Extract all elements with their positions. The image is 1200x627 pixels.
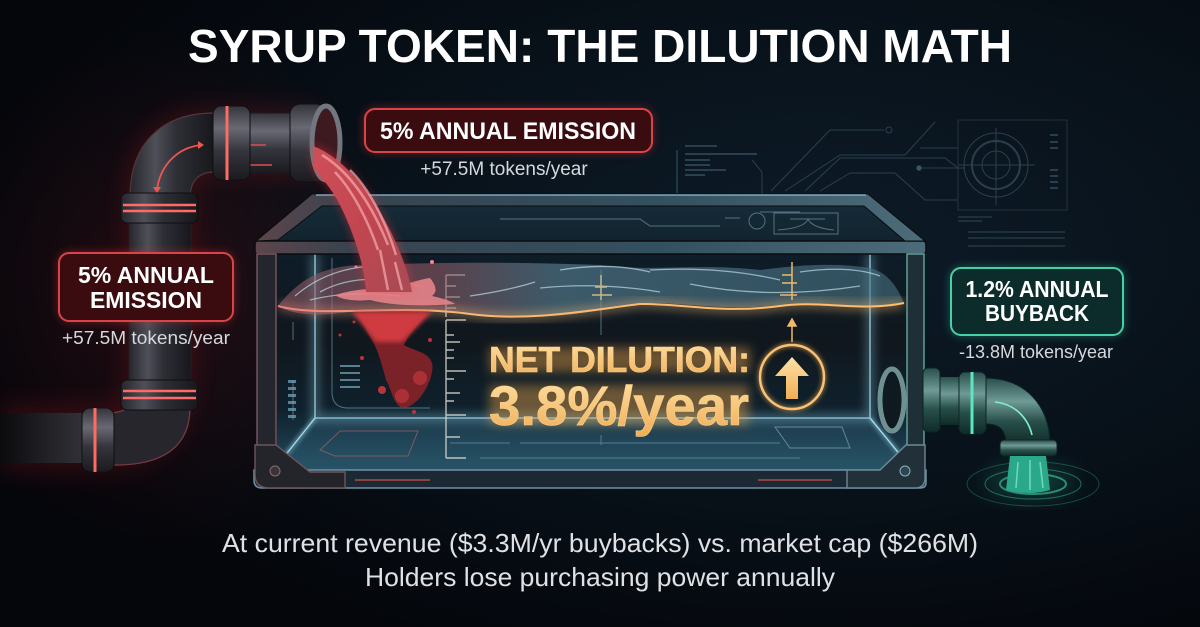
left bottom corner bracket xyxy=(255,445,345,488)
upper pipe xyxy=(245,113,295,173)
inner flange in tank xyxy=(880,369,904,431)
callout: left emission xyxy=(59,253,233,348)
tank back opening xyxy=(256,195,923,254)
scale ruler xyxy=(446,275,466,458)
ripple rings xyxy=(967,462,1099,506)
tank back wall glow xyxy=(280,254,906,462)
green water xyxy=(1006,456,1050,493)
callout: top emission: 5% ANNUAL EMISSION xyxy=(380,118,636,145)
callout: right buyback: -13.8M tokens/year xyxy=(959,342,1113,362)
pipe: red inlet xyxy=(0,104,340,472)
red plume in water xyxy=(338,312,432,414)
outlet pipe xyxy=(940,377,964,425)
lower elbow xyxy=(105,403,190,465)
net dilution figure: NET DILUTION: xyxy=(489,339,750,380)
callout: left emission: 5% ANNUAL xyxy=(78,262,214,288)
red water pour xyxy=(313,145,412,292)
elbow xyxy=(985,378,1050,445)
callout: top emission xyxy=(365,109,652,180)
water surface line glow xyxy=(278,303,904,317)
footer text: At current revenue ($3.3M/yr buybacks) vs. market cap ($266M) xyxy=(222,528,978,558)
net dilution figure xyxy=(489,339,750,437)
back top frame xyxy=(256,194,925,241)
flanges xyxy=(923,368,940,432)
callout: left emission: +57.5M tokens/year xyxy=(62,328,230,348)
icon: up arrow in circle xyxy=(760,345,824,409)
outlet flange xyxy=(290,104,340,182)
title: SYRUP TOKEN: THE DILUTION MATH xyxy=(188,20,1012,72)
footer text: Holders lose purchasing power annually xyxy=(365,562,835,592)
upper elbow xyxy=(130,113,214,198)
pipe glow xyxy=(0,142,320,438)
panel: storage tank xyxy=(254,194,926,488)
red splash xyxy=(335,260,455,305)
front top rail xyxy=(255,241,926,254)
callout: left emission: EMISSION xyxy=(90,287,202,313)
bottom rail xyxy=(254,470,926,488)
tank interior xyxy=(277,254,907,470)
tank HUD details xyxy=(293,205,850,458)
collars xyxy=(82,106,250,472)
horizontal inlet pipe xyxy=(0,413,90,463)
elbow arrow xyxy=(157,145,202,190)
water body xyxy=(278,263,904,316)
left post red glow xyxy=(257,260,261,440)
water surface line xyxy=(278,303,904,317)
red bands xyxy=(95,106,227,472)
tank floor xyxy=(279,418,906,470)
left post xyxy=(257,254,276,450)
outlet glow xyxy=(985,468,1075,496)
callout: right buyback: 1.2% ANNUAL xyxy=(966,276,1108,302)
callout: right buyback xyxy=(951,268,1123,362)
frame highlight xyxy=(316,194,866,196)
right post green glow xyxy=(920,260,924,365)
callout: top emission: +57.5M tokens/year xyxy=(420,159,588,180)
callout: right buyback: BUYBACK xyxy=(985,300,1089,326)
footer text xyxy=(222,528,978,592)
right post xyxy=(907,254,924,450)
pipe: green outlet xyxy=(880,368,1099,506)
level gauge xyxy=(592,262,797,342)
circuit graphics top right xyxy=(677,120,1067,246)
vertical pipe xyxy=(129,218,191,382)
net dilution figure: 3.8%/year xyxy=(489,374,749,437)
water streaks xyxy=(295,266,880,300)
right bottom corner bracket xyxy=(847,445,925,488)
